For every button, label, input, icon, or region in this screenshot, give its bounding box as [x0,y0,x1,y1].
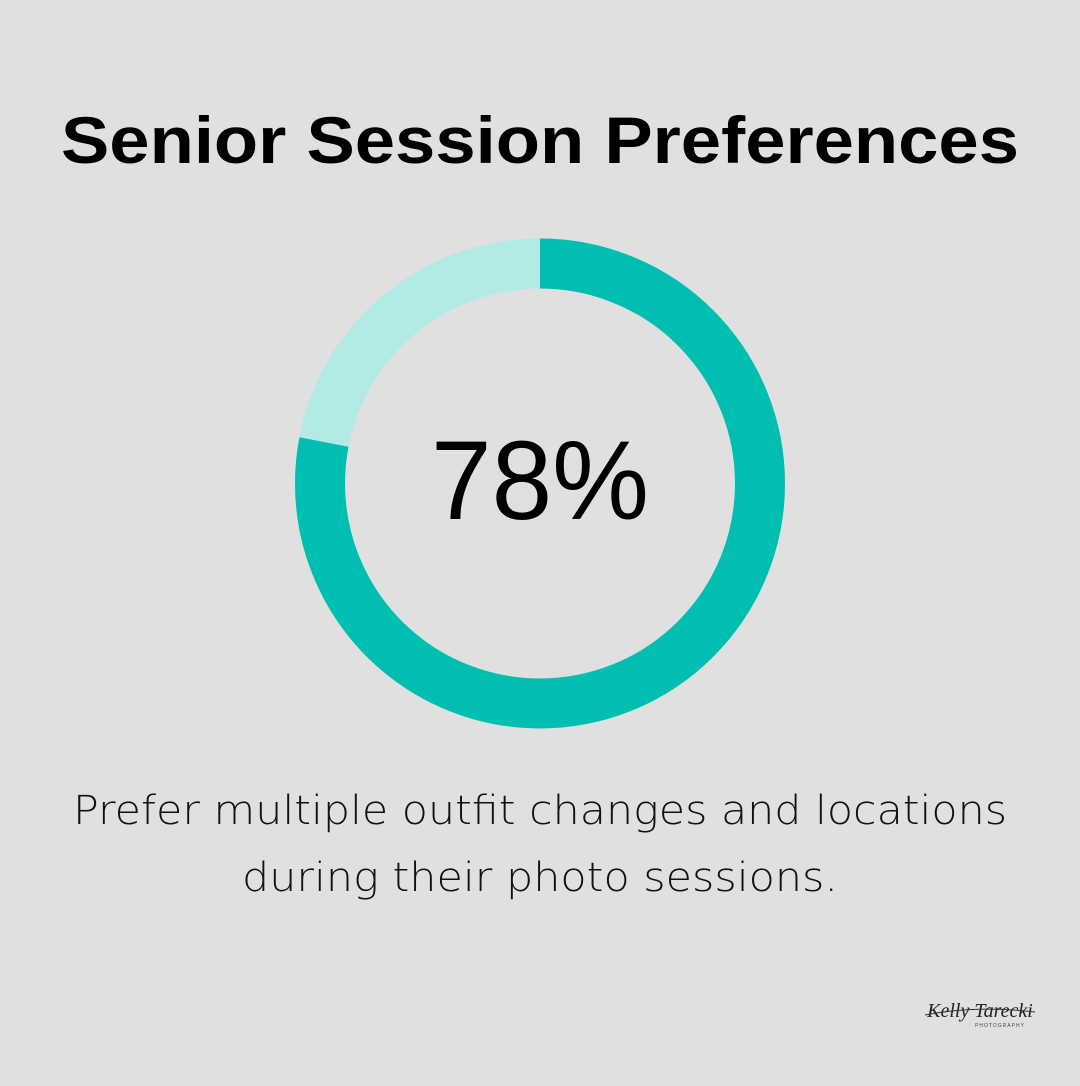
stat value: 78% [431,418,649,543]
description text [73,788,1007,901]
title: Senior Session Preferences [61,103,1019,177]
logo: Kelly Tarecki [926,1000,1033,1022]
description text: Prefer multiple outfit changes and locations [73,788,1007,834]
donut chart [320,264,760,704]
logo: PHOTOGRAPHY [975,1023,1025,1029]
description text: during their photo sessions. [242,855,838,901]
